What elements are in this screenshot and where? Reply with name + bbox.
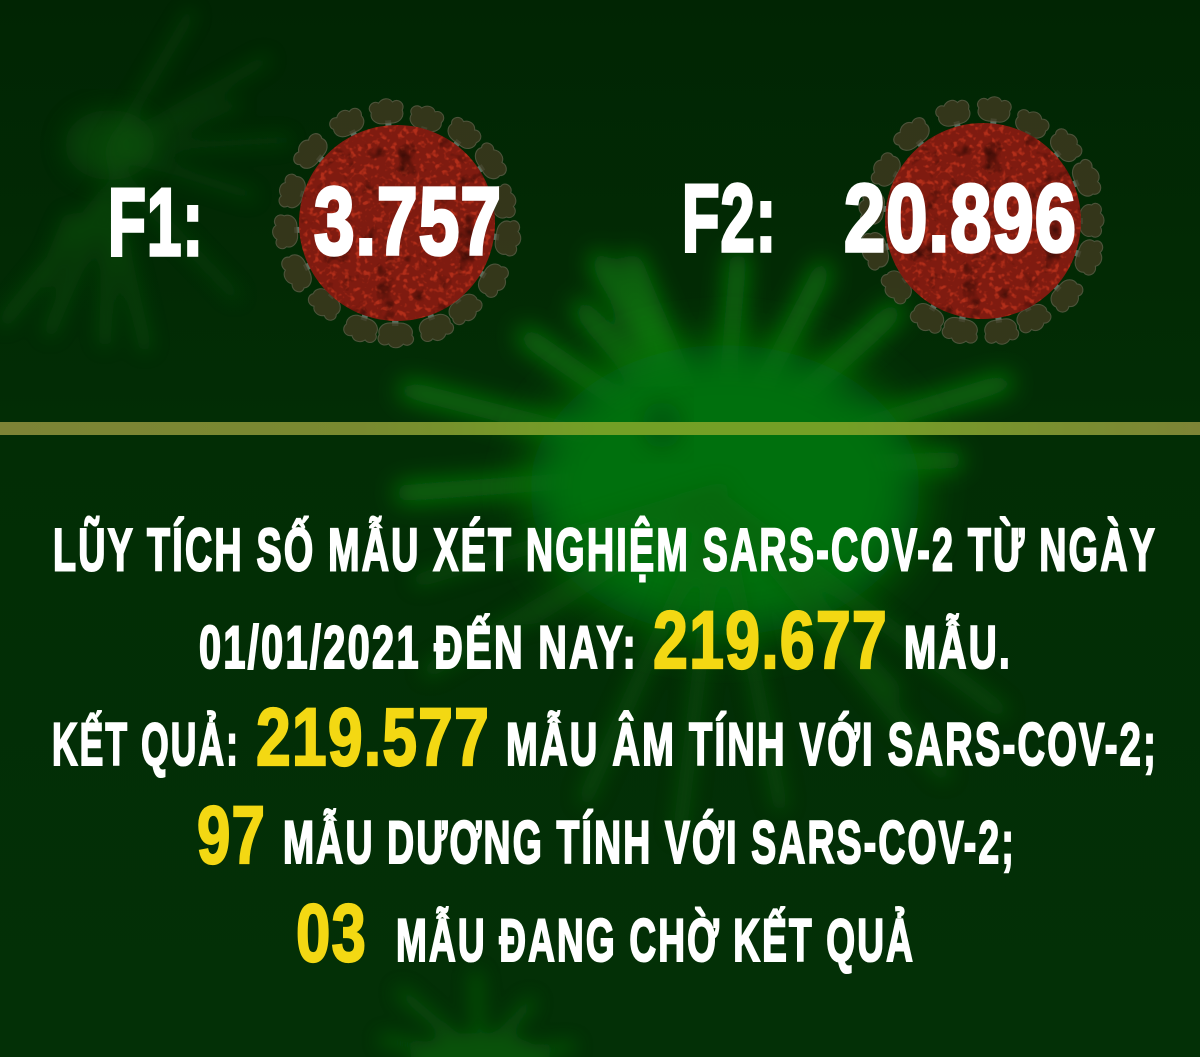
stat: F2: F2: xyxy=(682,165,777,272)
blurred green virus: upper left xyxy=(5,15,285,345)
line 5: 03 xyxy=(296,888,367,979)
line 2: 01/01/2021 ĐẾN NAY: xyxy=(199,614,638,681)
icon: red coronavirus F2 xyxy=(836,74,1131,368)
blurred green virus: bottom xyxy=(385,977,570,1057)
stat: F1: 3.757 xyxy=(314,168,502,275)
line 2: 219.677 xyxy=(653,595,888,686)
line 2 xyxy=(199,595,1012,686)
line 3 xyxy=(52,692,1158,783)
stat: F2 xyxy=(682,165,1077,272)
stat: F1 xyxy=(108,168,502,276)
divider band xyxy=(0,422,1200,435)
line 4: 97 xyxy=(197,790,266,881)
line 3: KẾT QUẢ: xyxy=(52,711,240,778)
stat: F1: F1: xyxy=(108,169,204,276)
line 2: MẪU. xyxy=(904,614,1012,681)
line 4 xyxy=(197,790,1016,881)
stat: F2: 20.896 xyxy=(844,165,1077,272)
line 3: 219.577 xyxy=(256,692,490,783)
text block: test results xyxy=(52,516,1158,979)
line 5 xyxy=(296,888,915,979)
icon: red coronavirus F1 xyxy=(271,97,523,348)
blurred green virus: centre xyxy=(405,262,1003,830)
